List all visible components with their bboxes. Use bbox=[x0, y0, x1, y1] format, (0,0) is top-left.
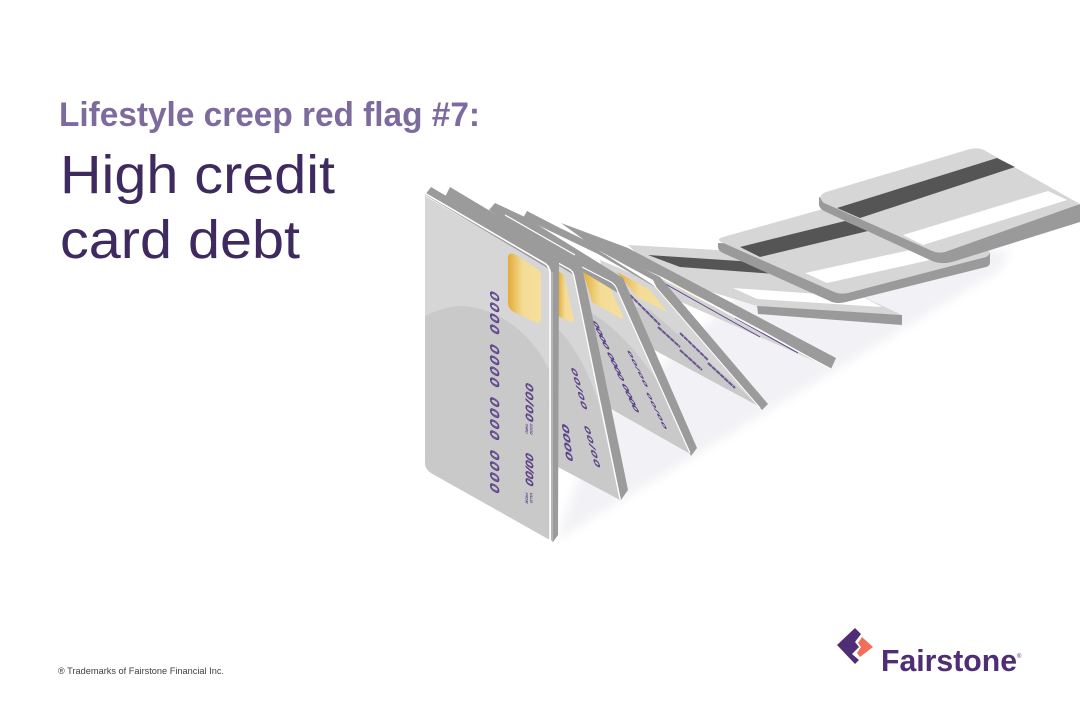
expiry: good thru: THRU bbox=[525, 422, 528, 435]
logo: Fairstone: ® bbox=[1017, 653, 1022, 660]
expiry: good thru: GOOD bbox=[529, 422, 533, 436]
illustration: falling credit cards bbox=[425, 148, 1080, 545]
card 5 bbox=[561, 223, 836, 369]
title: card debt bbox=[60, 210, 300, 270]
card number: 0000 0000 0000 0000 bbox=[488, 289, 502, 499]
card 2: 00/00 bbox=[582, 424, 602, 471]
expiry: valid from: FROM bbox=[525, 491, 528, 504]
card edge bbox=[425, 187, 559, 542]
expiry: good thru: 00/00 bbox=[523, 381, 535, 426]
card 2 bbox=[445, 187, 628, 500]
footnote: ® Trademarks of Fairstone Financial Inc. bbox=[58, 666, 224, 677]
card body bbox=[425, 196, 550, 540]
card 3 bbox=[489, 203, 697, 456]
expiry: valid from: VALID bbox=[529, 491, 533, 504]
card 7 (back view) bbox=[718, 207, 990, 303]
card 3: 00/00 bbox=[626, 349, 649, 389]
chip bbox=[508, 254, 541, 323]
logo mark bbox=[837, 628, 861, 664]
card 2: 0000 bbox=[560, 422, 575, 464]
card 6 (back view, tilted) bbox=[628, 245, 902, 325]
card 8 (back view, top) bbox=[819, 148, 1080, 263]
card 3: 0000 0000 0000 bbox=[590, 319, 641, 414]
logo wordmark: Fairstone bbox=[881, 643, 1017, 678]
title: High credit bbox=[60, 145, 335, 205]
expiry: valid from: 00/00 bbox=[523, 451, 534, 489]
card shading curve bbox=[425, 306, 553, 545]
logo: Fairstone bbox=[837, 628, 1022, 678]
title bbox=[60, 145, 335, 270]
card shadow bbox=[556, 240, 1010, 540]
subtitle: Lifestyle creep red flag #7: bbox=[59, 96, 480, 134]
card 4 bbox=[523, 211, 768, 410]
card 3: 00/00 bbox=[645, 391, 668, 431]
card 1 (front) bbox=[425, 187, 559, 545]
card 2: 00/00 bbox=[569, 366, 589, 413]
